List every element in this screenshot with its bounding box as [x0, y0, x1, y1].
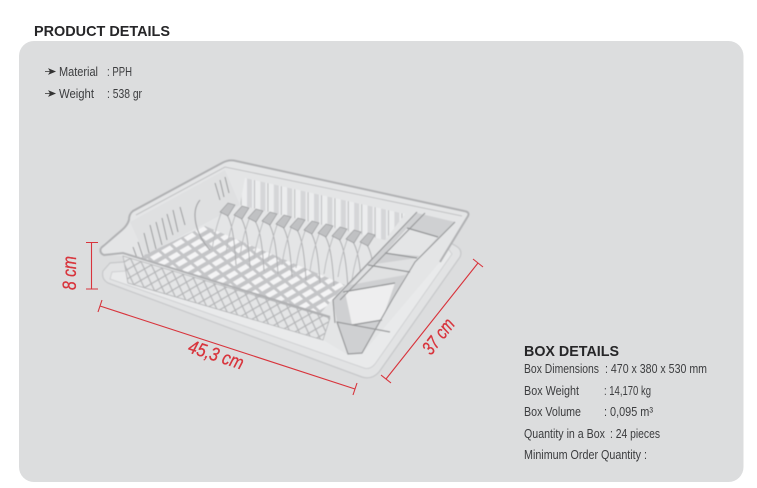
- plate rack teeth: [195, 200, 376, 295]
- dimension: width 37 cm: 37 cm: [418, 315, 460, 359]
- box volume: Box Volume: [524, 404, 581, 419]
- cutlery compartment: [333, 212, 455, 354]
- box volume value: : 0,095 m³: [604, 404, 654, 419]
- value: weight: : 538 gr: [107, 86, 143, 101]
- left wall wires: [133, 177, 229, 258]
- box weight: Box Weight: [524, 383, 579, 398]
- floor slots: [138, 226, 345, 316]
- label: material: Material: [59, 64, 98, 79]
- quantity value: : 24 pieces: [610, 426, 660, 441]
- rack body: [100, 160, 468, 355]
- product illustration: dish rack: [100, 160, 468, 378]
- text block: box specifications: [524, 361, 707, 462]
- box dimensions value: : 470 x 380 x 530 mm: [605, 361, 707, 376]
- dimension: length 45,3 cm: [98, 300, 357, 395]
- heading: product details: PRODUCT DETAILS: [34, 23, 170, 40]
- text block: product specifications: [45, 64, 143, 101]
- dimension: width 37 cm: [381, 259, 483, 383]
- box dimensions: Box Dimensions: [524, 361, 599, 376]
- quantity in a box: Quantity in a Box: [524, 426, 605, 441]
- dimension: height 8 cm: [60, 242, 98, 290]
- icon: arrow material: [45, 69, 55, 74]
- box weight value: : 14,170 kg: [604, 383, 651, 398]
- front mesh wall: [123, 256, 330, 340]
- value: material: : PPH: [107, 64, 132, 79]
- back wall slats: [240, 178, 405, 240]
- minimum order quantity: Minimum Order Quantity :: [524, 447, 647, 462]
- label: weight: Weight: [59, 86, 94, 101]
- rack rim: [100, 160, 468, 317]
- left wall: [130, 170, 240, 255]
- icon: arrow weight: [45, 91, 55, 96]
- drip tray: [103, 238, 461, 378]
- dimension: height 8 cm: 8 cm: [60, 256, 81, 290]
- dimension: length 45,3 cm: 45,3 cm: [185, 337, 246, 374]
- heading: box details: BOX DETAILS: [524, 343, 619, 360]
